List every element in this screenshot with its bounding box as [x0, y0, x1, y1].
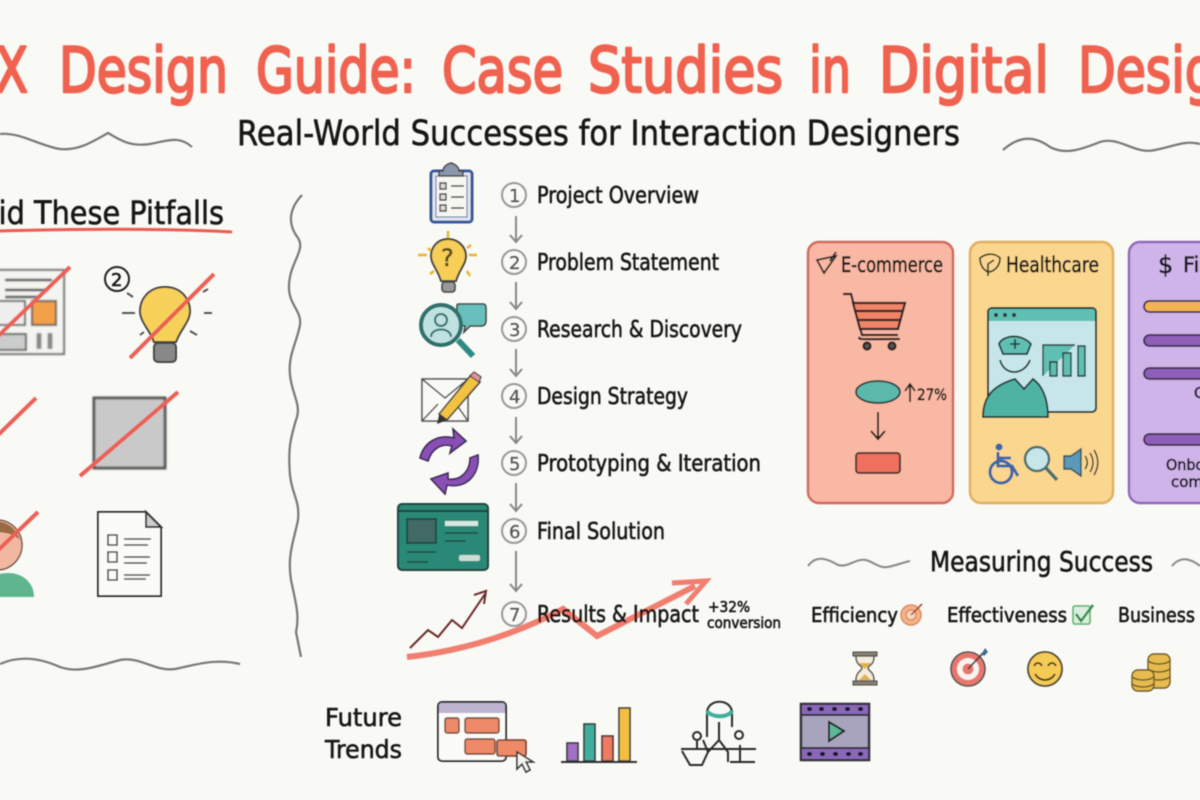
icon: target [951, 648, 988, 686]
panel: e-commerce card [808, 242, 953, 503]
step 4: Design Strategy [537, 384, 688, 410]
step arrows [510, 216, 522, 591]
icon: bar chart [561, 708, 637, 762]
card background [808, 242, 953, 503]
panel: process steps [398, 163, 781, 657]
icon: gray square [80, 392, 178, 476]
illustration: doctor on screen [983, 308, 1096, 417]
step 7: 7 [509, 605, 520, 626]
icon: research magnifier [421, 304, 486, 356]
heading underline [0, 229, 232, 232]
title: Digital [879, 34, 1049, 107]
conversion callout [707, 598, 781, 632]
step 5: Prototyping & Iteration [537, 451, 761, 477]
title: Guide: [256, 34, 416, 107]
icon: wheelchair [990, 444, 1018, 483]
icon: question bulb: ? [441, 244, 454, 272]
step 4: 4 [509, 387, 520, 408]
card background [1129, 242, 1200, 503]
title: in [809, 34, 851, 107]
metric up 27% [905, 384, 947, 404]
icon: coins [1132, 654, 1170, 691]
title: Case [442, 34, 563, 107]
card heading: E-commerce [841, 253, 943, 277]
icon: smiley [1028, 652, 1062, 686]
step 3: Research & Discovery [537, 317, 742, 343]
title: Design [59, 34, 228, 107]
bottom wave [0, 659, 240, 670]
icon: growth chart [410, 591, 486, 648]
icon: question bulb [418, 231, 477, 292]
card heading [980, 253, 1099, 277]
icon: interface mockup [438, 702, 533, 772]
icon: clipboard [431, 163, 472, 222]
step 6: Final Solution [537, 519, 665, 545]
top right wave [1003, 139, 1200, 151]
icon: document checklist [98, 512, 161, 596]
conversion callout: +32% [708, 598, 750, 616]
title: Studies [588, 34, 783, 107]
icon: shopping cart [843, 294, 905, 350]
step 1: Project Overview [537, 183, 699, 209]
icon: hourglass [853, 652, 877, 685]
icon: bulb with number two [105, 267, 214, 362]
icon: cluttered layout [0, 267, 70, 354]
panel: avoid these pitfalls [0, 194, 240, 670]
progress bars [1144, 301, 1200, 445]
step 1: 1 [509, 186, 520, 207]
bar labels [1166, 384, 1200, 491]
step 2: 2 [509, 253, 520, 274]
icon: speaker [1064, 449, 1098, 476]
icon: user face [0, 512, 38, 597]
icon: network balance [681, 702, 756, 765]
vertical wavy divider [289, 195, 302, 657]
card background [970, 242, 1113, 503]
panel: measuring success [808, 545, 1200, 691]
flow rectangle [856, 453, 900, 473]
icon: teal screen [398, 504, 488, 570]
conversion callout: conversion [707, 614, 781, 632]
flow oval [856, 381, 900, 403]
arrow: red growth arrow [407, 581, 706, 657]
step 4 [502, 384, 688, 410]
icon: bulb with number two: 2 [111, 270, 122, 291]
step 3: 3 [509, 320, 520, 341]
card heading [817, 252, 943, 277]
top left wave [0, 133, 192, 149]
metric: effectiveness: Effectiveness [947, 603, 1067, 627]
panel: healthcare card [970, 242, 1113, 503]
future trends heading [324, 703, 402, 764]
metric up 27%: 27% [917, 385, 947, 404]
left wave [808, 559, 910, 567]
card heading: $ [1158, 251, 1173, 279]
step 6 [502, 519, 665, 545]
icon: magnifier [1025, 447, 1057, 480]
icon: video strip [801, 704, 869, 760]
future trends heading: Trends [324, 735, 402, 764]
section heading: Measuring Success [930, 545, 1153, 578]
step 5: 5 [509, 454, 520, 475]
step 7: Results & Impact [537, 602, 699, 628]
title [0, 34, 1200, 107]
card heading: Healthcare [1006, 253, 1099, 277]
step 2: Problem Statement [537, 250, 719, 276]
panel: finance card [1129, 242, 1200, 503]
icon: crossed element [0, 398, 36, 438]
icon: envelope and pencil [422, 372, 481, 424]
arrow: flow down [871, 412, 885, 439]
card heading [1158, 251, 1200, 279]
icon: refresh arrows [420, 429, 478, 494]
metric: efficiency: Efficiency [811, 603, 898, 627]
subtitle: Real-World Successes for Interaction Designers [237, 114, 960, 154]
future trends heading: Future [325, 703, 402, 732]
panel: future trends [324, 702, 869, 772]
right wave [1172, 559, 1200, 566]
step 6: 6 [509, 522, 520, 543]
